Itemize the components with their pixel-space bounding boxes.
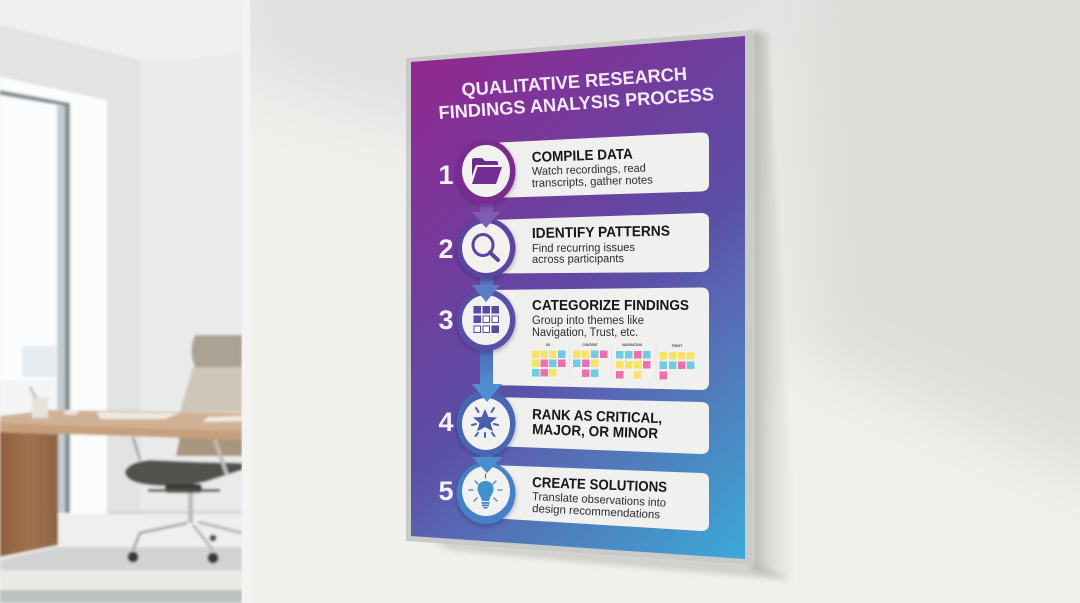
- step 1: transcripts, gather notes: [532, 174, 653, 190]
- column: UX: UX: [546, 343, 551, 347]
- desk top: [0, 408, 242, 433]
- circle 3: [456, 289, 516, 351]
- column: NAVIGATION: NAVIGATION: [622, 343, 642, 347]
- arrow tip over circle 4: [472, 384, 502, 402]
- circle 2: [456, 218, 516, 278]
- wall edge strip: [242, 0, 250, 603]
- desk items: [32, 397, 48, 418]
- ceiling: [0, 0, 242, 60]
- column: TRUST: [660, 344, 694, 380]
- icon: starburst: [472, 408, 498, 437]
- body: compile data: Watch recordings, read: [532, 163, 646, 178]
- arrow tip over circle 3: [472, 285, 500, 302]
- heading: create solutions: CREATE SOLUTIONS: [532, 475, 668, 496]
- column: NAVIGATION: [616, 343, 650, 378]
- number 4: 4: [438, 407, 454, 437]
- step 4: MAJOR, OR MINOR: [532, 422, 659, 442]
- icon: grid: [474, 306, 498, 332]
- number 2: 2: [438, 234, 454, 264]
- card 5: [490, 465, 709, 531]
- heading: identify patterns: IDENTIFY PATTERNS: [532, 224, 670, 242]
- poster frame: [406, 30, 752, 565]
- step 2: across participants: [532, 253, 624, 266]
- title: QUALITATIVE RESEARCH: [461, 63, 688, 100]
- step 3: Navigation, Trust, etc.: [532, 327, 638, 339]
- body: create solutions: Translate observations into: [532, 491, 666, 510]
- step 1: [438, 132, 709, 228]
- heading: rank: RANK AS CRITICAL,: [532, 407, 662, 427]
- heading: categorize findings: CATEGORIZE FINDINGS: [532, 298, 689, 314]
- card 1: [490, 132, 709, 198]
- sticky note board: [532, 343, 694, 380]
- arrow 1 head over ring: [472, 212, 500, 228]
- window glass: [0, 93, 58, 513]
- title: [438, 63, 715, 123]
- desk leg: [0, 432, 58, 557]
- arrow tip over circle 2: [472, 212, 500, 228]
- number 5: 5: [438, 476, 454, 506]
- step 4: [438, 384, 709, 473]
- office room photo: [0, 0, 242, 603]
- floor: [0, 514, 242, 603]
- step 5: design recommendations: [532, 503, 661, 521]
- step 2: [438, 212, 709, 302]
- column: CONTENT: [573, 343, 608, 377]
- step 5: [438, 457, 709, 531]
- arrow 1 to 2: [472, 198, 500, 228]
- icon: folder: [472, 158, 502, 184]
- heading: compile data: COMPILE DATA: [532, 146, 634, 166]
- icon: magnifier: [473, 234, 498, 260]
- poster shadow: [430, 30, 792, 582]
- arrow 4 to 5: [472, 447, 502, 473]
- column: CONTENT: CONTENT: [582, 343, 598, 347]
- arrow 2 to 3: [472, 274, 500, 302]
- number 3: 3: [438, 305, 454, 335]
- number 1: 1: [438, 160, 454, 190]
- chair: [192, 335, 242, 367]
- circle 1: [456, 140, 516, 204]
- window recess: [0, 77, 107, 514]
- arrow 3 to 4: [472, 345, 502, 402]
- card 3: [490, 288, 709, 390]
- cityscape haze: [22, 346, 56, 377]
- title: FINDINGS ANALYSIS PROCESS: [438, 83, 715, 123]
- circle 4: [456, 390, 516, 456]
- circle 5: [456, 462, 516, 524]
- window frame: [0, 90, 70, 107]
- column: TRUST: TRUST: [672, 344, 682, 348]
- icon: lightbulb: [469, 474, 502, 508]
- step 3: [438, 285, 709, 402]
- card 2: [490, 213, 709, 274]
- column: UX: [532, 343, 566, 376]
- arrow tip over circle 5: [472, 457, 502, 473]
- body: identify patterns: Find recurring issues: [532, 242, 635, 255]
- card 4: [490, 397, 709, 454]
- poster gradient: [411, 36, 745, 559]
- body: categorize findings: Group into themes like: [532, 315, 644, 327]
- left wall: [0, 25, 140, 513]
- wall background: [250, 0, 1080, 464]
